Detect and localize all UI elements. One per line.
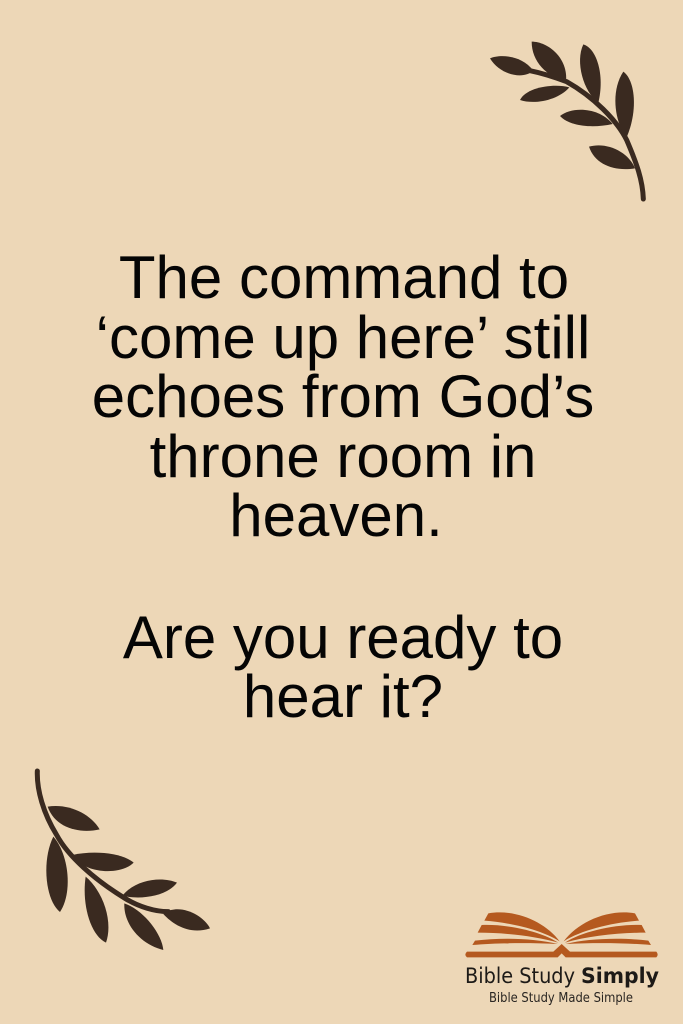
- main message: hear it?: [243, 663, 443, 730]
- main message: throne room in: [150, 423, 536, 490]
- main message: The command to: [119, 244, 569, 311]
- logo name: Simply: [581, 964, 659, 988]
- logo tagline: Bible Study Made Simple: [489, 991, 633, 1006]
- main message: [92, 244, 594, 730]
- icon: open book: [465, 912, 658, 957]
- main message: heaven.: [229, 482, 443, 549]
- icon: leafy branch bottom left: [37, 771, 210, 950]
- main message: Are you ready to: [123, 604, 563, 671]
- logo: Bible Study Simply: [465, 912, 659, 1006]
- main message: ‘come up here’ still: [96, 304, 590, 371]
- logo name: [465, 964, 659, 988]
- logo name: Bible Study: [465, 964, 575, 988]
- icon: leafy branch top right: [490, 42, 643, 199]
- main message: echoes from God’s: [92, 363, 594, 430]
